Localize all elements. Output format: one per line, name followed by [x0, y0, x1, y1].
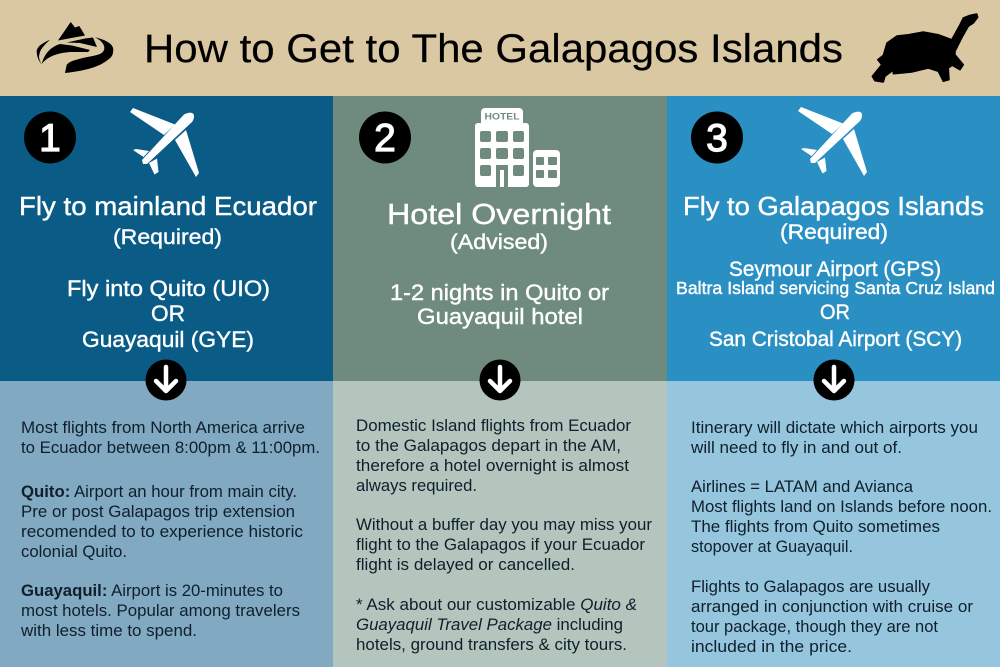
icon: tortoise — [872, 14, 978, 82]
body text: Without a buffer day you may miss your — [356, 516, 653, 534]
number badge 2: 2 — [374, 117, 396, 160]
sub-heading: (Advised) — [450, 231, 548, 254]
sub-heading: (Required) — [780, 221, 888, 244]
icon: airplane — [798, 107, 867, 176]
icon: hotel: HOTEL — [484, 112, 520, 122]
icon: airplane — [130, 108, 199, 177]
body text — [690, 419, 992, 656]
airports text: Seymour Airport (GPS) — [729, 258, 941, 281]
body text: colonial Quito. — [21, 543, 127, 561]
sub-heading: (Required) — [113, 226, 222, 249]
body text: most hotels. Popular among travelers — [21, 602, 300, 620]
body text: flight is delayed or cancelled. — [356, 556, 575, 574]
body text: will need to fly in and out of. — [690, 439, 902, 457]
arrow badge — [814, 360, 854, 400]
body text: Airlines = LATAM and Avianca — [691, 478, 914, 496]
body text: Itinerary will dictate which airports you — [691, 419, 978, 437]
body text: always required. — [356, 477, 477, 495]
airports text: Fly into Quito (UIO) — [67, 276, 270, 301]
heading: Fly to Galapagos Islands — [683, 191, 984, 221]
body text — [20, 419, 320, 640]
icon: mountain road logo — [37, 22, 113, 73]
number badge 3: 3 — [706, 117, 728, 160]
body text: Most flights from North America arrive — [21, 419, 305, 437]
airports text: OR — [820, 301, 850, 324]
body text: Pre or post Galapagos trip extension — [21, 503, 295, 521]
body text: included in the price. — [691, 638, 852, 656]
panel: step 1 fly to mainland Ecuador — [0, 96, 333, 667]
body text: Flights to Galapagos are usually — [691, 578, 931, 596]
body text: to Ecuador between 8:00pm & 11:00pm. — [21, 439, 320, 457]
airports text: OR — [151, 301, 185, 326]
body text: hotels, ground transfers & city tours. — [356, 636, 627, 654]
body text: Guayaquil Travel Package including — [356, 616, 623, 634]
body text: stopover at Guayaquil. — [691, 538, 853, 556]
body text: flight to the Galapagos if your Ecuador — [356, 536, 646, 554]
number badge 1 — [24, 112, 76, 164]
arrow badge — [480, 360, 520, 400]
number badge 2 — [359, 112, 411, 164]
number badge 1: 1 — [39, 117, 61, 160]
heading: Fly to mainland Ecuador — [19, 191, 317, 221]
panel: step 2 hotel overnight — [333, 96, 667, 667]
body text: to the Galapagos depart in the AM, — [356, 437, 621, 455]
arrow badge — [146, 360, 186, 400]
header band — [0, 0, 1000, 96]
nights text — [390, 280, 609, 329]
body text: Most flights land on Islands before noon. — [691, 498, 992, 516]
body text: Guayaquil: Airport is 20-minutes to — [21, 582, 283, 600]
body text: therefore a hotel overnight is almost — [356, 457, 629, 475]
body text: Quito: Airport an hour from main city. — [21, 483, 297, 501]
body text: tour package, though they are not — [691, 618, 938, 636]
body text — [356, 417, 653, 654]
nights text: 1-2 nights in Quito or — [390, 280, 609, 305]
body text: Domestic Island flights from Ecuador — [356, 417, 632, 435]
icon: hotel — [475, 108, 560, 187]
airports text: San Cristobal Airport (SCY) — [709, 328, 962, 351]
heading: Hotel Overnight — [387, 199, 611, 231]
airports text — [676, 258, 995, 351]
panel: step 3 fly to Galapagos Islands — [667, 96, 1000, 667]
body text: The flights from Quito sometimes — [691, 518, 940, 536]
body text: recomended to to experience historic — [21, 523, 303, 541]
airports text: Guayaquil (GYE) — [82, 327, 254, 352]
body text: arranged in conjunction with cruise or — [691, 598, 974, 616]
nights text: Guayaquil hotel — [417, 304, 583, 329]
airports text: Baltra Island servicing Santa Cruz Island — [676, 278, 995, 298]
body text: * Ask about our customizable Quito & — [356, 596, 637, 614]
number badge 3 — [691, 112, 743, 164]
title: How to Get to The Galapagos Islands — [144, 27, 843, 71]
body text: with less time to spend. — [20, 622, 197, 640]
airports text — [67, 276, 270, 352]
